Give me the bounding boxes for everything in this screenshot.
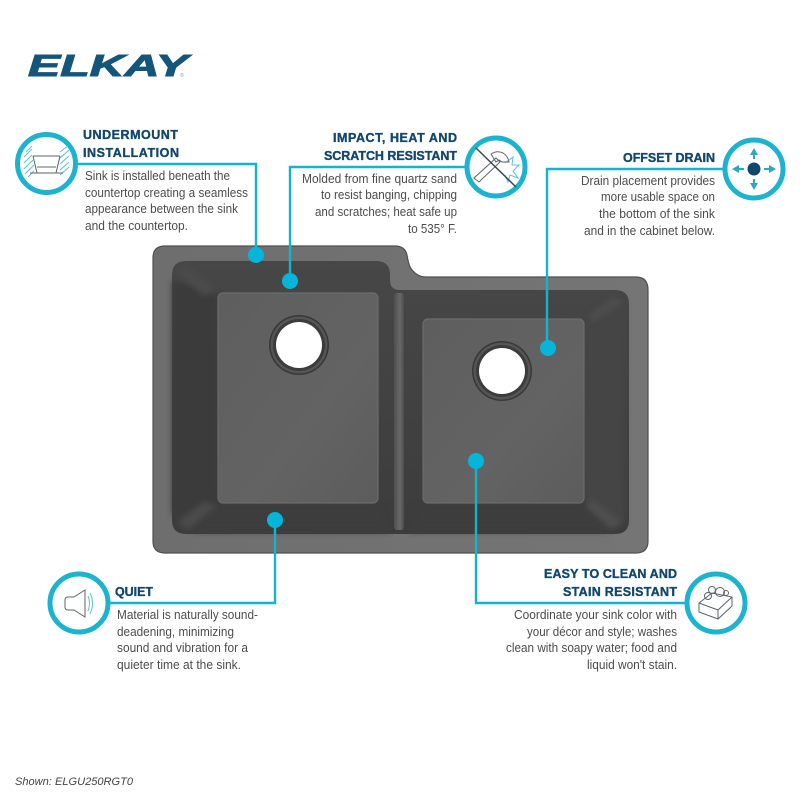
sink basin	[172, 261, 629, 534]
icon: speaker	[50, 574, 108, 632]
body text	[581, 173, 715, 238]
heading: QUIET	[115, 585, 153, 599]
callout: undermount installation	[18, 128, 264, 263]
body text: the bottom of the sink	[599, 206, 715, 221]
icon: undermount sink	[18, 134, 76, 192]
body text: quieter time at the sink.	[117, 657, 241, 672]
body text	[302, 171, 457, 236]
heading: IMPACT, HEAT AND	[333, 131, 457, 145]
icon: drain with four arrows	[725, 140, 783, 198]
divider between bowls	[394, 293, 404, 530]
basin walls shading	[172, 266, 625, 532]
body text: Molded from fine quartz sand	[302, 171, 457, 186]
body text: Coordinate your sink color with	[514, 607, 677, 622]
body text	[506, 607, 677, 672]
body text: liquid won't stain.	[587, 657, 677, 672]
callout: easy to clean and stain resistant	[468, 453, 745, 672]
body text: and in the cabinet below.	[584, 223, 715, 238]
body text: Material is naturally sound-	[117, 607, 258, 622]
body text: more usable space on	[601, 189, 715, 204]
heading: STAIN RESISTANT	[563, 585, 677, 599]
logo: Elkay	[28, 48, 193, 83]
right drain	[472, 341, 532, 401]
body text: to 535° F.	[408, 221, 457, 236]
right bowl floor	[423, 319, 584, 503]
heading	[324, 131, 457, 163]
leader line	[108, 512, 283, 603]
leader line	[540, 169, 726, 356]
callout: offset drain	[540, 140, 783, 356]
icon: soap bar with bubbles	[687, 574, 745, 632]
body text	[85, 168, 248, 233]
body text	[117, 607, 258, 672]
left bowl floor	[218, 293, 378, 503]
logo: Elkay: ELKAY	[28, 48, 193, 83]
leader line	[468, 453, 686, 603]
body text: and scratches; heat safe up	[315, 204, 457, 219]
body text: countertop creating a seamless	[85, 185, 248, 200]
heading: INSTALLATION	[83, 146, 179, 160]
heading: EASY TO CLEAN AND	[544, 567, 677, 581]
body text: to resist banging, chipping	[321, 187, 457, 202]
body text: clean with soapy water; food and	[506, 640, 677, 655]
icon: hammer crossed out	[467, 138, 525, 196]
body text: deadening, minimizing	[117, 624, 234, 639]
leader line	[282, 167, 468, 289]
body text: Sink is installed beneath the	[85, 168, 230, 183]
body text: sound and vibration for a	[117, 640, 249, 655]
heading: OFFSET DRAIN	[623, 151, 715, 165]
body text: appearance between the sink	[85, 201, 238, 216]
callout: impact, heat and scratch resistant	[282, 131, 525, 289]
footer model note: Shown: ELGU250RGT0	[15, 776, 134, 788]
body text: your décor and style; washes	[527, 624, 677, 639]
heading: SCRATCH RESISTANT	[324, 149, 457, 163]
sink product image	[153, 246, 648, 553]
sink rim	[153, 246, 648, 553]
heading	[83, 128, 179, 160]
heading: UNDERMOUNT	[83, 128, 178, 142]
callout: quiet	[50, 512, 283, 672]
body text: and the countertop.	[85, 218, 188, 233]
leader line	[76, 164, 264, 263]
left drain	[269, 315, 329, 375]
heading	[544, 567, 677, 599]
logo: Elkay: ®	[180, 72, 184, 79]
body text: Drain placement provides	[581, 173, 715, 188]
